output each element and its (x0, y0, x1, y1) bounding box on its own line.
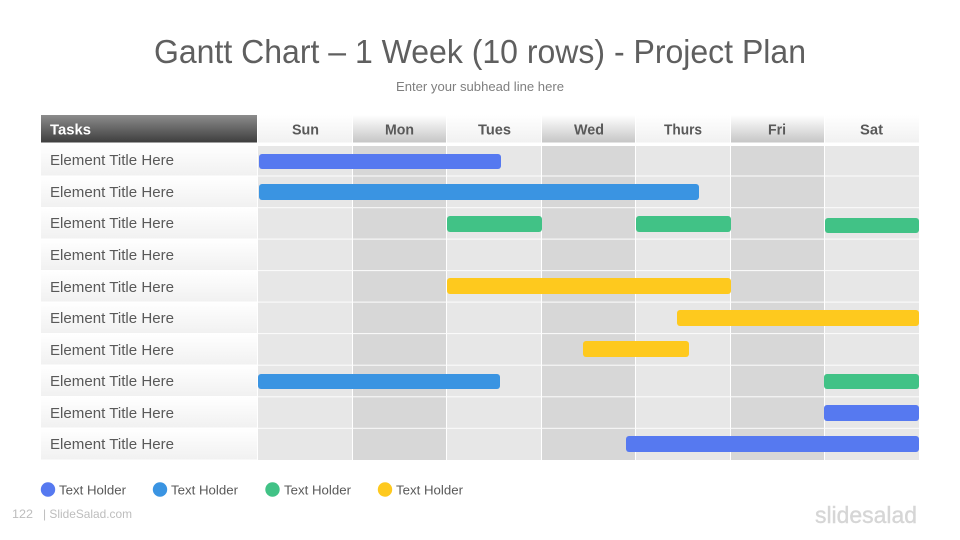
header: days: Mon (385, 122, 414, 138)
header: days (258, 115, 919, 142)
header: tasks (41, 115, 257, 142)
task labels: Element Title Here (50, 215, 174, 232)
grid columns (258, 146, 919, 460)
legend: Text Holder (396, 484, 463, 498)
task labels: Element Title Here (50, 373, 174, 390)
task labels: Element Title Here (50, 405, 174, 422)
header: days: Wed (574, 122, 604, 138)
header: tasks: Tasks (50, 122, 91, 138)
task labels: Element Title Here (50, 342, 174, 359)
task labels: Element Title Here (50, 184, 174, 201)
legend: Text Holder (284, 484, 351, 498)
task labels: Element Title Here (50, 247, 174, 264)
header: days: Thurs (664, 122, 702, 138)
header: days: Tues (478, 122, 511, 138)
title: Gantt Chart – 1 Week (10 rows) - Project Plan (154, 33, 806, 70)
footer page number: 122 (12, 507, 33, 521)
task labels: Element Title Here (50, 436, 174, 453)
task labels: Element Title Here (50, 152, 174, 169)
header: days: Sat (860, 122, 883, 138)
gantt bars (258, 154, 919, 452)
task labels: Element Title Here (50, 310, 174, 327)
legend: Text Holder (171, 484, 238, 498)
legend: Text Holder (59, 484, 126, 498)
footer page number: | SlideSalad.com (43, 507, 132, 521)
logo wordmark: slidesalad (815, 502, 917, 528)
header: days: Fri (768, 122, 786, 138)
header: days: Sun (292, 122, 319, 138)
task labels (41, 145, 257, 460)
task labels: Element Title Here (50, 279, 174, 296)
subhead: Enter your subhead line here (396, 79, 564, 94)
gantt table (41, 115, 919, 460)
legend (41, 482, 463, 498)
